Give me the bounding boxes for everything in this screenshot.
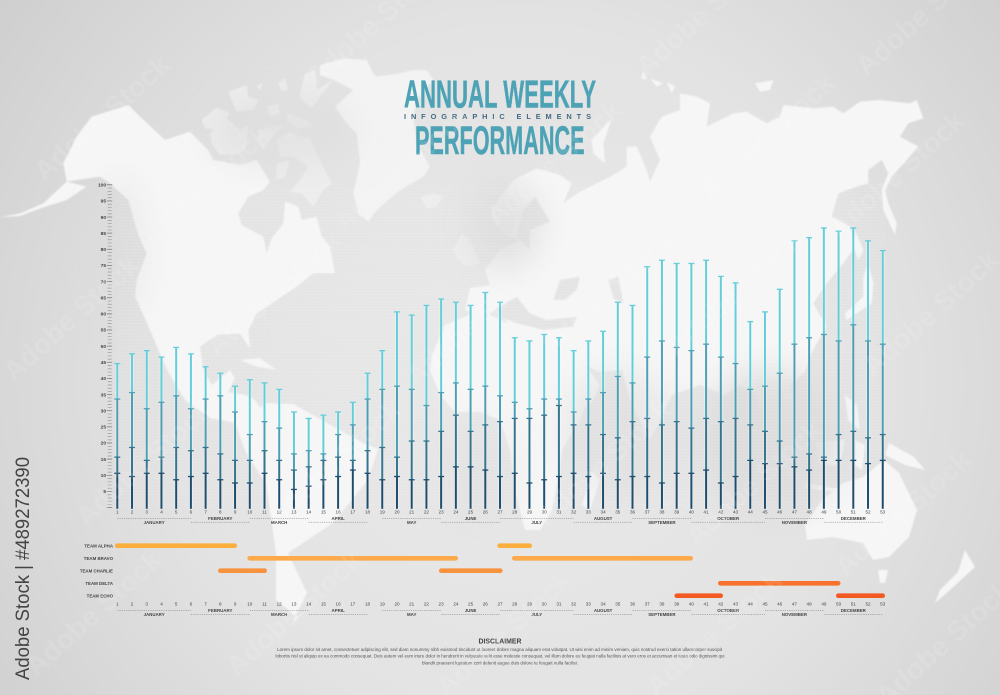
- week numbers under chart: 19: [380, 509, 385, 514]
- week numbers under chart: 23: [439, 509, 444, 514]
- title: ANNUAL WEEKLY: [404, 74, 596, 116]
- week numbers under chart: 35: [615, 509, 621, 514]
- watermarks: Adobe Stock: [260, 394, 408, 532]
- month brackets under chart: MARCH: [271, 520, 287, 525]
- vertical axis: 90: [101, 215, 106, 221]
- watermarks: Adobe Stock: [328, 100, 476, 238]
- team: bravo: [84, 556, 693, 561]
- week numbers under timeline: 17: [350, 602, 356, 607]
- week numbers under timeline: 53: [880, 602, 886, 607]
- week numbers under chart: 11: [262, 509, 267, 514]
- week numbers under chart: 32: [571, 509, 577, 514]
- week numbers under timeline: 45: [762, 602, 768, 607]
- week numbers under chart: [116, 509, 886, 514]
- title: PERFORMANCE: [415, 119, 584, 163]
- vertical axis: 10: [101, 473, 106, 479]
- vertical axis: 40: [101, 376, 106, 382]
- vertical axis: [98, 182, 110, 508]
- vertical axis: 5: [103, 489, 106, 495]
- week numbers under timeline: 42: [718, 602, 724, 607]
- week numbers under timeline: 46: [777, 602, 783, 607]
- watermarks: Adobe Stock: [28, 49, 176, 187]
- week numbers under chart: 14: [306, 509, 312, 514]
- vertical axis: 50: [101, 344, 106, 350]
- week numbers under timeline: 22: [424, 602, 429, 607]
- watermarks: Adobe Stock: [680, 414, 828, 552]
- week numbers under timeline: 15: [321, 602, 326, 607]
- week numbers under chart: 38: [659, 509, 665, 514]
- week numbers under timeline: 3: [145, 602, 148, 607]
- week numbers under chart: 34: [601, 509, 606, 514]
- month brackets under chart: JANUARY: [144, 520, 165, 525]
- week numbers under timeline: 20: [394, 602, 400, 607]
- subtitle: INFOGRAPHIC ELEMENTS: [404, 112, 591, 121]
- month brackets under timeline: MARCH: [271, 612, 287, 617]
- week numbers under chart: 22: [424, 509, 429, 514]
- week numbers under timeline: 48: [807, 602, 812, 607]
- week numbers under chart: 28: [512, 509, 518, 514]
- month brackets under chart: SEPTEMBER: [648, 520, 676, 525]
- map: soft shading over land: [95, 95, 840, 520]
- week numbers under chart: 5: [175, 509, 178, 514]
- week numbers under chart: 25: [468, 509, 474, 514]
- week numbers under timeline: 7: [204, 602, 207, 607]
- team timeline: [80, 543, 885, 598]
- watermarks: Adobe Stock: [200, 224, 348, 362]
- week numbers under chart: 2: [131, 509, 134, 514]
- watermarks: Adobe Stock: [480, 94, 628, 232]
- vertical axis: 65: [101, 296, 106, 302]
- week numbers under chart: 4: [160, 509, 163, 514]
- week numbers under chart: 49: [821, 509, 827, 514]
- watermarks: Adobe Stock: [533, 224, 681, 362]
- disclaimer heading: DISCLAIMER: [478, 636, 522, 645]
- week numbers under timeline: 26: [483, 602, 488, 607]
- week numbers under chart: 29: [527, 509, 532, 514]
- week numbers under chart: 37: [645, 509, 650, 514]
- week numbers under timeline: 49: [821, 602, 827, 607]
- week numbers under chart: 46: [777, 509, 783, 514]
- week numbers under chart: 31: [556, 509, 562, 514]
- week numbers under timeline: 19: [380, 602, 385, 607]
- month brackets under chart: JUNE: [465, 516, 477, 521]
- month brackets under timeline: [117, 608, 883, 617]
- week numbers under timeline: 33: [586, 602, 591, 607]
- week numbers under timeline: 35: [615, 602, 621, 607]
- month brackets under timeline: MAY: [407, 612, 416, 617]
- week numbers under timeline: 39: [674, 602, 680, 607]
- week numbers under chart: 10: [247, 509, 253, 514]
- week numbers under chart: 17: [350, 509, 356, 514]
- week numbers under timeline: 8: [219, 602, 222, 607]
- week numbers under chart: 36: [630, 509, 635, 514]
- watermarks: Adobe Stock: [220, 544, 368, 682]
- week numbers under chart: 52: [865, 509, 871, 514]
- vertical axis: 95: [101, 199, 106, 205]
- month brackets under timeline: APRIL: [332, 608, 345, 613]
- vertical axis: 45: [101, 360, 106, 366]
- watermarks: Adobe Stock: [530, 394, 678, 532]
- week numbers under timeline: 16: [336, 602, 341, 607]
- week numbers under chart: 15: [321, 509, 326, 514]
- week numbers under chart: 30: [542, 509, 547, 514]
- week numbers under chart: 47: [792, 509, 797, 514]
- week numbers under timeline: 40: [689, 602, 694, 607]
- week numbers under chart: 8: [219, 509, 222, 514]
- week numbers under timeline: 6: [190, 602, 193, 607]
- week numbers under timeline: 28: [512, 602, 518, 607]
- weekly bar chart: [117, 228, 883, 509]
- week numbers under timeline: 43: [733, 602, 738, 607]
- team: delta: [85, 581, 840, 586]
- disclaimer body: [276, 647, 724, 666]
- title: [404, 74, 596, 163]
- week numbers under timeline: 37: [645, 602, 650, 607]
- week numbers under timeline: 25: [468, 602, 474, 607]
- week numbers under timeline: 12: [277, 602, 282, 607]
- month brackets under chart: OCTOBER: [717, 516, 740, 521]
- team: delta: TEAM DELTA: [85, 581, 114, 586]
- vertical axis: 85: [101, 231, 106, 237]
- vertical axis: 15: [101, 457, 106, 463]
- vertical axis: 25: [101, 425, 106, 431]
- week numbers under chart: 3: [145, 509, 148, 514]
- month brackets under chart: AUGUST: [594, 516, 613, 521]
- month brackets under chart: DECEMBER: [841, 516, 867, 521]
- month brackets under chart: MAY: [407, 520, 416, 525]
- week numbers under chart: 13: [291, 509, 297, 514]
- week numbers under chart: 44: [748, 509, 753, 514]
- week numbers under timeline: 34: [601, 602, 606, 607]
- month brackets under chart: [117, 516, 883, 525]
- month brackets under timeline: JUNE: [465, 608, 477, 613]
- vertical axis: 80: [101, 247, 106, 253]
- watermarks: Adobe Stock: [829, 444, 977, 582]
- week numbers under chart: 7: [204, 509, 207, 514]
- week numbers under chart: 51: [851, 509, 856, 514]
- week numbers under chart: 18: [365, 509, 370, 514]
- week numbers under chart: 40: [689, 509, 694, 514]
- month brackets under timeline: AUGUST: [594, 608, 613, 613]
- vertical axis: 30: [101, 408, 106, 414]
- month brackets under timeline: NOVEMBER: [782, 612, 808, 617]
- week numbers under chart: 53: [880, 509, 886, 514]
- week numbers under chart: 41: [704, 509, 709, 514]
- week numbers under timeline: 38: [659, 602, 665, 607]
- week numbers under chart: 39: [674, 509, 680, 514]
- week numbers under chart: 21: [409, 509, 415, 514]
- week numbers under timeline: 47: [792, 602, 797, 607]
- vertical axis: 70: [101, 279, 106, 285]
- team: bravo: TEAM BRAVO: [84, 556, 114, 561]
- week numbers under timeline: 5: [175, 602, 178, 607]
- disclaimer body: blandit praesent luptatum zzril delenit augue duis dolore te feugait nulla facilisi.: [422, 660, 578, 666]
- week numbers under timeline: 44: [748, 602, 753, 607]
- team: echo: [87, 593, 885, 598]
- world map: [0, 58, 975, 623]
- vertical axis: 75: [101, 263, 106, 269]
- vertical axis: 20: [101, 441, 106, 447]
- month brackets under timeline: JULY: [531, 612, 542, 617]
- week numbers under chart: 45: [762, 509, 768, 514]
- month brackets under timeline: JANUARY: [144, 612, 165, 617]
- vertical axis: 60: [101, 312, 106, 318]
- month brackets under timeline: DECEMBER: [841, 608, 867, 613]
- stock id side label: Adobe Stock | #489272390: [13, 457, 34, 680]
- watermarks: Adobe Stock: [660, 224, 808, 362]
- month brackets under chart: FEBRUARY: [208, 516, 232, 521]
- disclaimer: [276, 636, 724, 666]
- watermarks: Adobe Stock: [0, 249, 145, 387]
- week numbers under timeline: 21: [409, 602, 415, 607]
- week numbers under timeline: 36: [630, 602, 635, 607]
- week numbers under chart: 33: [586, 509, 591, 514]
- map: Eurasia: [465, 70, 923, 440]
- week numbers under chart: 48: [807, 509, 812, 514]
- week numbers under timeline: 41: [704, 602, 709, 607]
- team: echo: TEAM ECHO: [87, 593, 114, 598]
- week numbers under timeline: 23: [439, 602, 444, 607]
- week numbers under timeline: 4: [160, 602, 163, 607]
- watermarks: Adobe Stock: [128, 119, 276, 257]
- week numbers under chart: 6: [190, 509, 193, 514]
- vertical axis: 100: [98, 182, 106, 188]
- week numbers under timeline: 50: [836, 602, 842, 607]
- week numbers under timeline: 10: [247, 602, 253, 607]
- week numbers under chart: 9: [234, 509, 237, 514]
- month brackets under timeline: FEBRUARY: [208, 608, 232, 613]
- watermarks: Adobe Stock: [400, 254, 548, 392]
- week numbers under timeline: 29: [527, 602, 532, 607]
- week numbers under timeline: 13: [291, 602, 297, 607]
- map: inland seas: [500, 197, 623, 407]
- week numbers under timeline: 11: [262, 602, 267, 607]
- week numbers under chart: 26: [483, 509, 488, 514]
- week numbers under chart: 12: [277, 509, 282, 514]
- disclaimer body: lobortis nisl ut aliquip ex ea commodo consequat. Duis autem vel eum iriure dolor in hendrerit in vulputate velit esse molestie consequat, vel illum dolore eu feugiat nulla facilisis at vero eros et accumsan et iusto odio dignissim qui: [276, 654, 724, 660]
- watermarks: Adobe Stock: [693, 67, 841, 205]
- week numbers under timeline: [116, 602, 886, 607]
- team: charlie: [80, 568, 503, 573]
- week numbers under chart: 24: [453, 509, 459, 514]
- chart grid: [117, 185, 885, 508]
- week numbers under timeline: 52: [865, 602, 871, 607]
- week numbers under timeline: 27: [497, 602, 503, 607]
- month brackets under chart: JULY: [531, 520, 542, 525]
- week numbers under chart: 42: [718, 509, 724, 514]
- map: Americas, Greenland and Arctic islands: [0, 58, 480, 623]
- week numbers under timeline: 31: [556, 602, 562, 607]
- watermarks: Adobe Stock: [20, 544, 168, 682]
- disclaimer body: Lorem ipsum dolor sit amet, consectetuer adipiscing elit, sed diam nonummy nibh euismod tincidunt ut laoreet dolore magna aliquam erat volutpat. Ut wisi enim ad minim veniam, quis nostrud exerci tation ullamcorper suscipit: [277, 647, 723, 653]
- team: charlie: TEAM CHARLIE: [80, 568, 113, 573]
- team: alpha: TEAM ALPHA: [84, 543, 114, 548]
- week numbers under timeline: 14: [306, 602, 312, 607]
- month brackets under chart: APRIL: [332, 516, 345, 521]
- week numbers under timeline: 24: [453, 602, 459, 607]
- month brackets under chart: NOVEMBER: [782, 520, 808, 525]
- watermarks: Adobe Stock: [823, 105, 971, 243]
- month brackets under timeline: SEPTEMBER: [648, 612, 676, 617]
- week numbers under timeline: 18: [365, 602, 370, 607]
- week numbers under timeline: 30: [542, 602, 547, 607]
- team: alpha: [84, 543, 532, 548]
- week numbers under chart: 16: [336, 509, 341, 514]
- watermarks: Adobe Stock: [70, 394, 218, 532]
- month brackets under timeline: OCTOBER: [717, 608, 740, 613]
- week numbers under timeline: 1: [116, 602, 119, 607]
- week numbers under timeline: 9: [234, 602, 237, 607]
- week numbers under timeline: 2: [131, 602, 134, 607]
- week numbers under chart: 50: [836, 509, 842, 514]
- week numbers under timeline: 51: [851, 602, 856, 607]
- map: Africa, Australia and Pacific islands: [430, 310, 975, 603]
- vertical axis: 35: [101, 392, 106, 398]
- week numbers under chart: 1: [116, 509, 119, 514]
- week numbers under timeline: 32: [571, 602, 577, 607]
- vertical axis: 55: [101, 328, 106, 334]
- week numbers under chart: 27: [497, 509, 503, 514]
- week numbers under chart: 20: [394, 509, 400, 514]
- week numbers under chart: 43: [733, 509, 738, 514]
